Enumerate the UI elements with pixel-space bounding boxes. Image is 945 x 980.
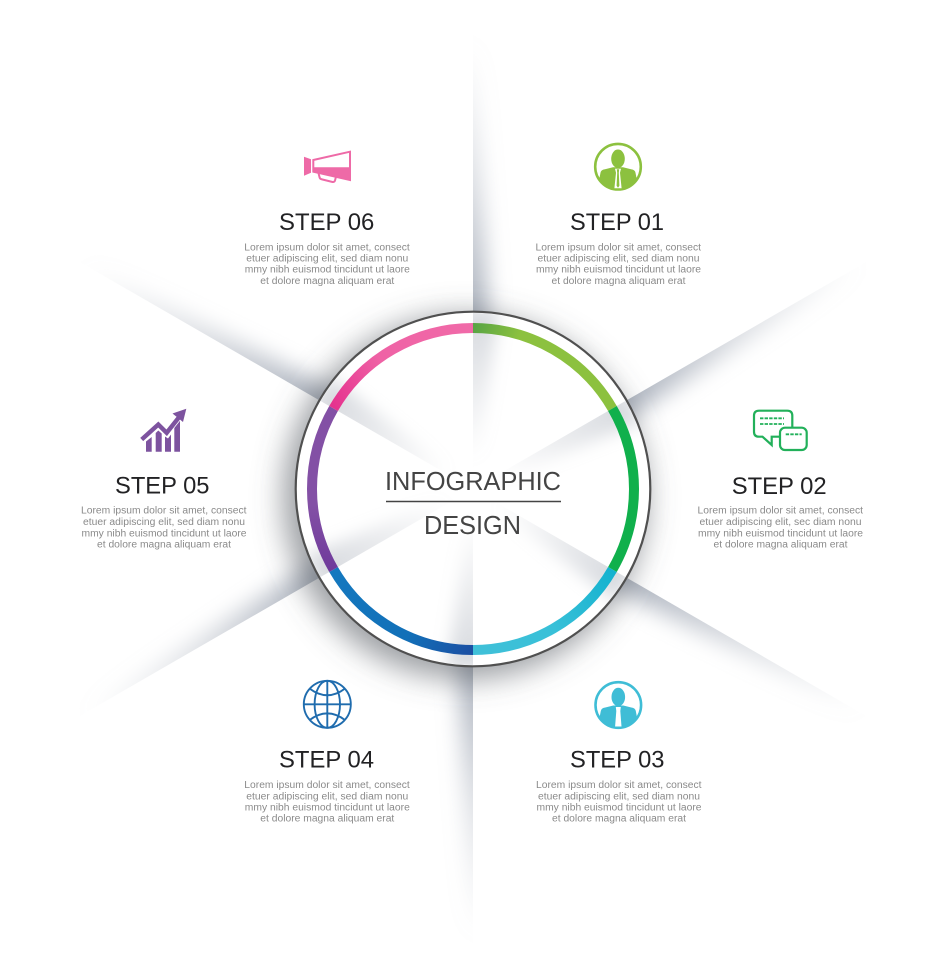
icon: globe: [304, 681, 351, 728]
icon: businessman green: [595, 144, 641, 191]
text block: step 02: mmy nibh euismod tincidunt ut laore: [698, 528, 863, 539]
heading: step 03: STEP 03: [570, 747, 664, 774]
center title: DESIGN: [424, 510, 521, 540]
text block: step 01: et dolore magna aliquam erat: [552, 276, 686, 287]
text block: step 01: etuer adipiscing elit, sed diam nonu: [538, 254, 700, 264]
text block: step 06: et dolore magna aliquam erat: [260, 276, 395, 287]
panel: step 04: [244, 681, 410, 824]
text block: step 05: etuer adipiscing elit, sed diam nonu: [83, 517, 245, 528]
text block: step 03: Lorem ipsum dolor sit amet, consect: [536, 780, 702, 791]
ring segment 02: [612, 408, 634, 570]
ring segment 05: [312, 408, 334, 570]
panel: step 06: [244, 152, 410, 287]
text block: step 04: [244, 780, 410, 824]
text block: step 01: Lorem ipsum dolor sit amet, consect: [536, 242, 701, 253]
central circle: [283, 309, 650, 679]
icon: chat bubbles: [754, 411, 807, 450]
heading: step 05: STEP 05: [115, 472, 210, 500]
circle outer outline: [296, 312, 650, 666]
text block: step 01: [536, 242, 701, 287]
circle drop shadow: [283, 315, 647, 679]
circle white face: [296, 312, 650, 666]
ring segment 03: [473, 570, 612, 650]
panel: step 02: [698, 411, 863, 551]
center title: [385, 466, 561, 540]
ring segment 01: [473, 328, 612, 408]
icon: megaphone: [304, 152, 350, 182]
text block: step 06: etuer adipiscing elit, sed diam nonu: [246, 254, 408, 264]
heading: step 06: STEP 06: [279, 209, 374, 236]
text block: step 03: et dolore magna aliquam erat: [552, 813, 686, 824]
heading: step 04: STEP 04: [279, 747, 374, 774]
text block: step 04: mmy nibh euismod tincidunt ut laore: [245, 802, 410, 813]
ring segment 06: [334, 328, 473, 408]
panel: step 03: [536, 682, 702, 824]
heading: step 02: STEP 02: [732, 473, 827, 500]
panel: step 05: [81, 409, 247, 551]
text block: step 02: etuer adipiscing elit, sec diam nonu: [700, 517, 862, 528]
text block: step 05: mmy nibh euismod tincidunt ut laore: [82, 528, 247, 539]
icon: businessman blue: [596, 682, 641, 729]
icon: growth chart: [142, 409, 186, 452]
text block: step 04: etuer adipiscing elit, sed diam nonu: [246, 791, 408, 802]
heading: step 01: STEP 01: [570, 209, 664, 236]
text block: step 05: [81, 506, 247, 551]
text block: step 04: et dolore magna aliquam erat: [260, 813, 395, 824]
text block: step 02: [698, 506, 863, 551]
text block: step 05: Lorem ipsum dolor sit amet, consect: [81, 506, 247, 517]
text block: step 02: et dolore magna aliquam erat: [714, 540, 848, 551]
text block: step 06: Lorem ipsum dolor sit amet, consect: [244, 242, 410, 253]
text block: step 05: et dolore magna aliquam erat: [97, 540, 231, 551]
text block: step 06: [244, 242, 410, 287]
inner fold shading: [304, 309, 642, 669]
ring segment 04: [334, 570, 473, 650]
panel: step 01: [536, 144, 701, 287]
text block: step 06: mmy nibh euismod tincidunt ut laore: [245, 265, 410, 276]
text block: step 03: etuer adipiscing elit, sed diam nonu: [538, 791, 700, 802]
background fold shadows: [75, 44, 871, 934]
center title: INFOGRAPHIC: [385, 466, 561, 496]
text block: step 01: mmy nibh euismod tincidunt ut laore: [536, 265, 701, 276]
text block: step 03: [536, 780, 702, 824]
text block: step 04: Lorem ipsum dolor sit amet, consect: [244, 780, 410, 791]
text block: step 02: Lorem ipsum dolor sit amet, consect: [698, 506, 863, 517]
text block: step 03: mmy nibh euismod tincidunt ut laore: [536, 802, 702, 813]
infographic canvas: [82, 94, 863, 884]
